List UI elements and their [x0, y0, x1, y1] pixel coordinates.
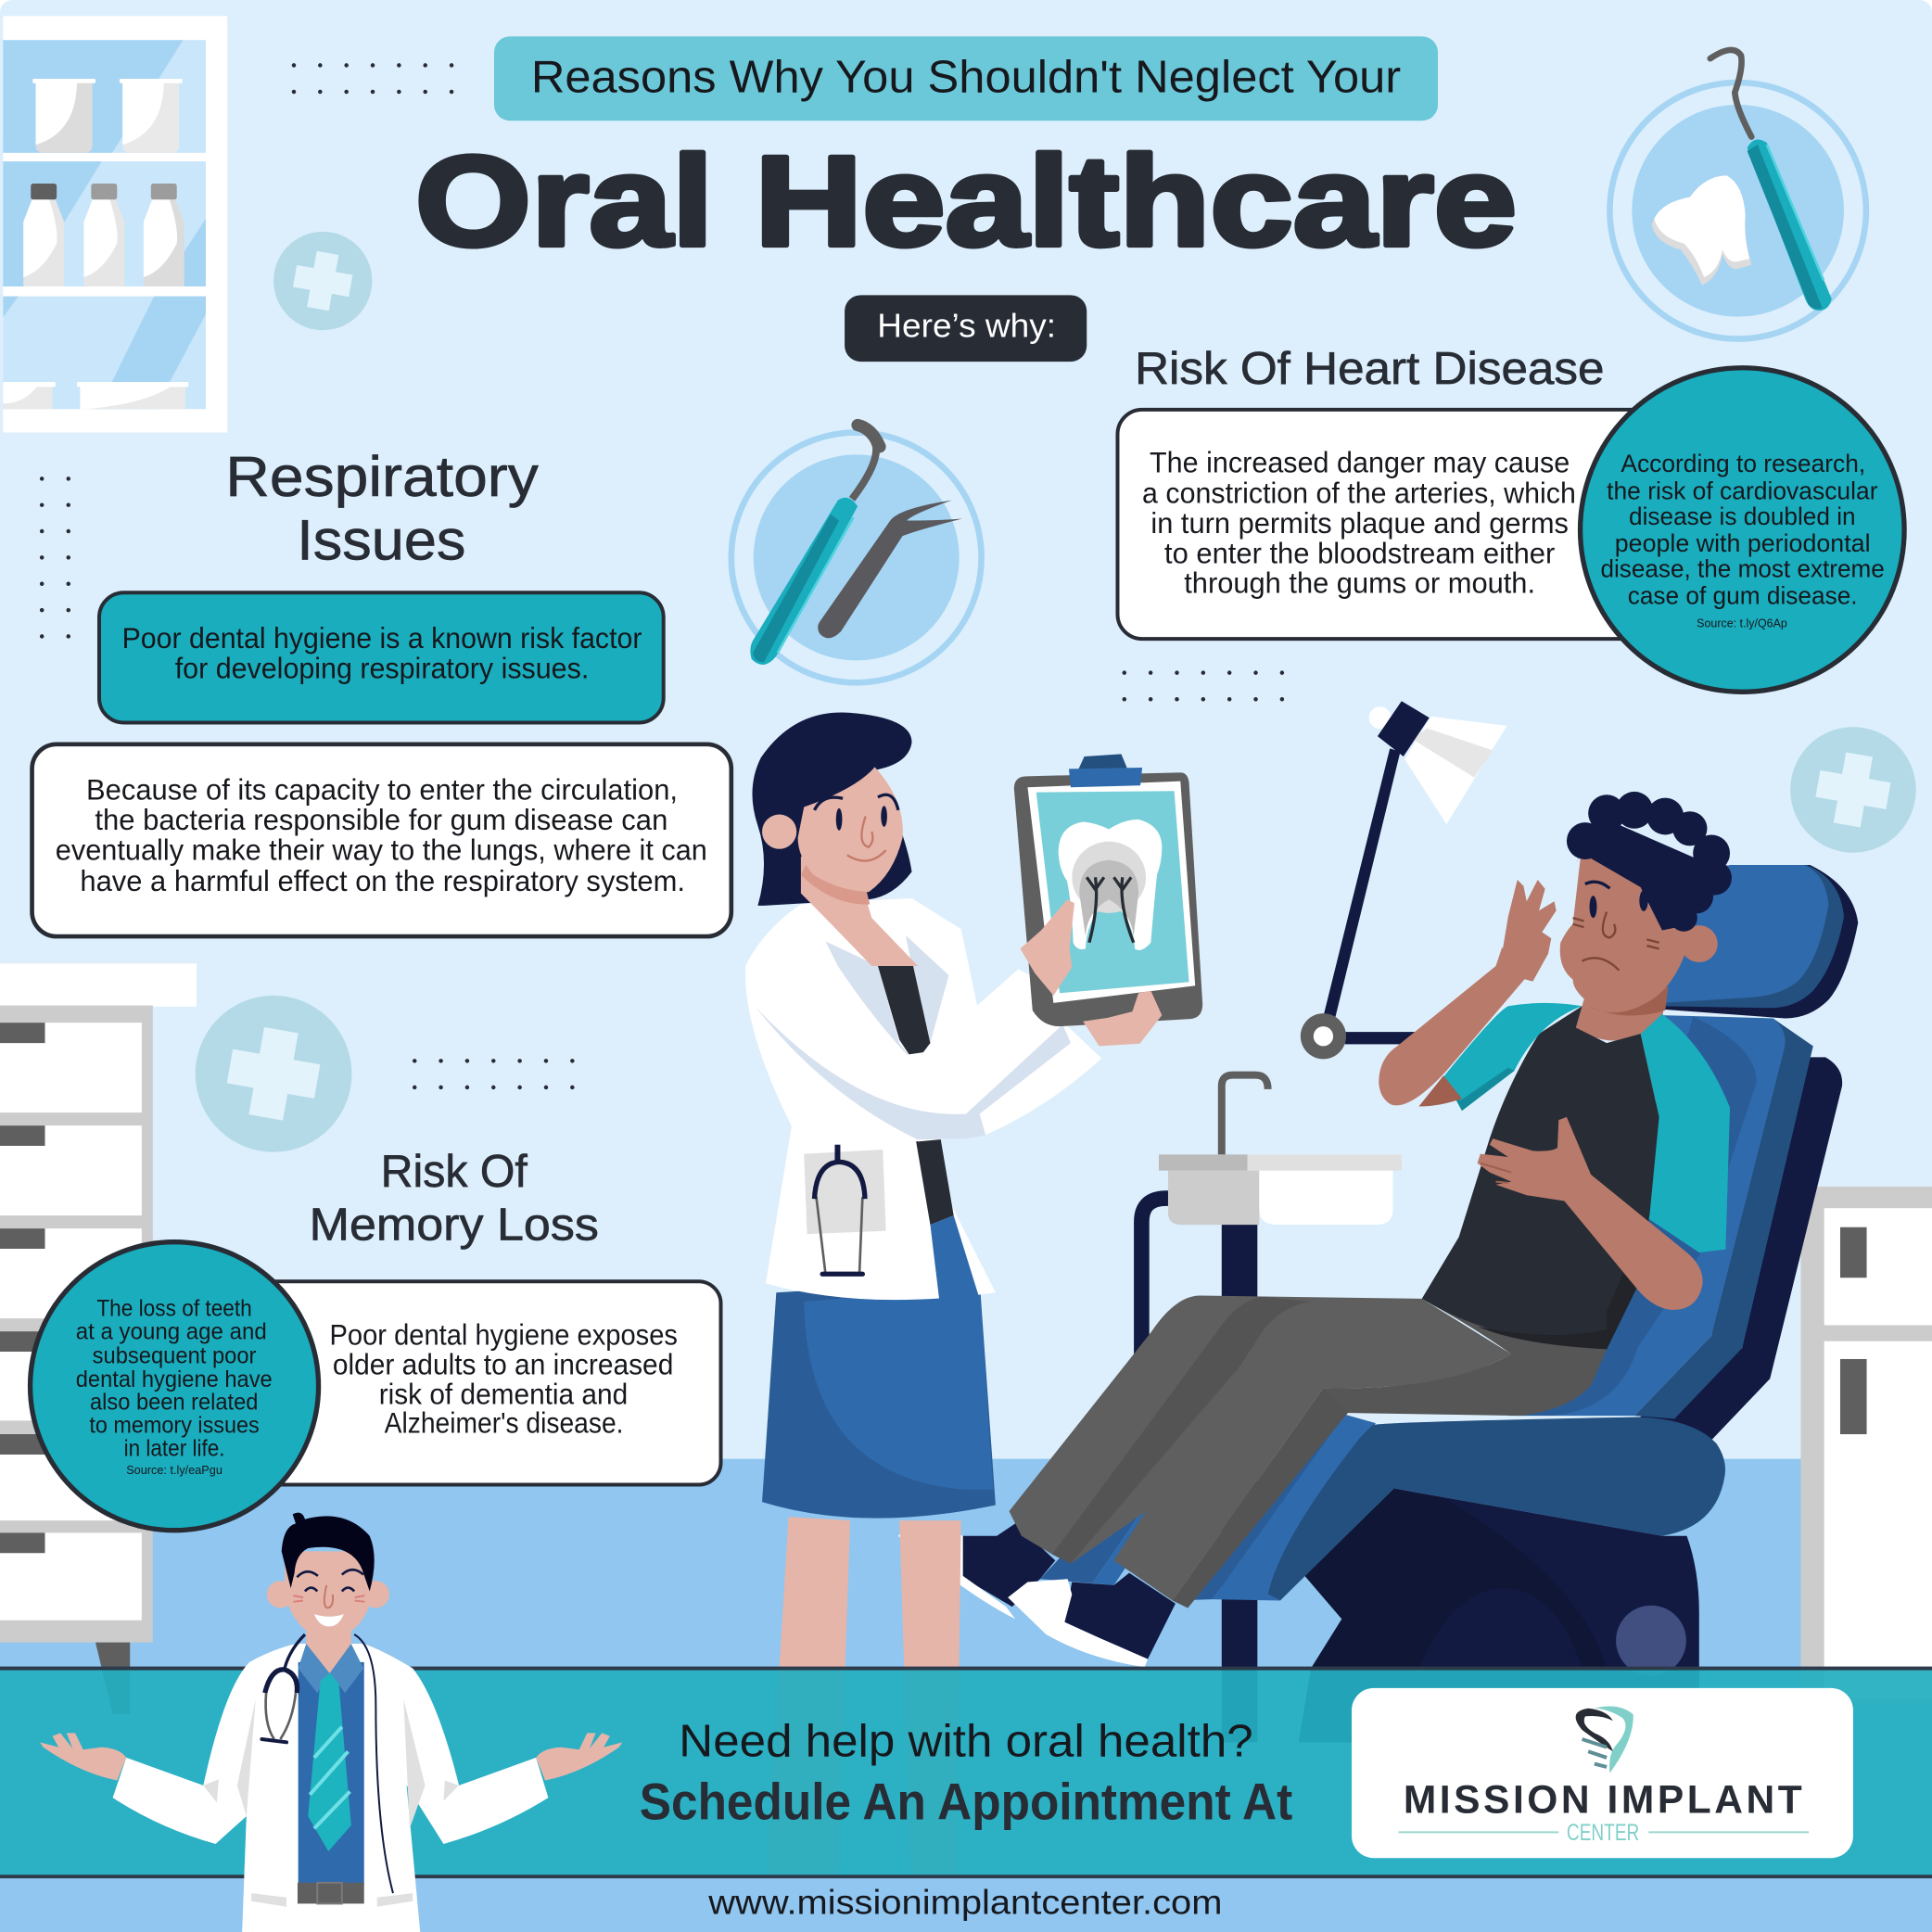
title banner: Reasons Why You Shouldn't Neglect Your	[531, 52, 1401, 103]
dentist pointing hand	[1020, 899, 1074, 996]
text block: lungs: Because of its capacity to enter the circulation,	[86, 774, 678, 807]
callout: cardiovascular risk: According to research,	[1621, 449, 1865, 477]
heading: heart disease: Risk Of Heart Disease	[1135, 343, 1604, 394]
callout: cardiovascular risk: disease, the most extreme	[1600, 554, 1885, 583]
appointment line: Schedule An Appointment At	[640, 1772, 1292, 1830]
text block: arteries: a constriction of the arteries, which	[1142, 477, 1576, 509]
heading: respiratory issues: Respiratory	[225, 445, 539, 508]
callout: risk factor: for developing respiratory issues.	[175, 653, 589, 685]
logo card	[1352, 1688, 1853, 1858]
skirt	[762, 1280, 996, 1519]
here's why pill: Here’s why:	[877, 307, 1056, 345]
text block: dementia: Poor dental hygiene exposes	[330, 1319, 678, 1352]
male doctor	[40, 1513, 622, 1932]
dental chair	[1040, 865, 1858, 1742]
text block: dementia: older adults to an increased	[333, 1349, 673, 1381]
call to action: Need help with oral health?	[679, 1716, 1253, 1767]
dental lamp	[1301, 701, 1506, 1059]
heading: respiratory issues	[225, 445, 539, 571]
logo name: MISSION IMPLANT	[1404, 1778, 1802, 1823]
callout: risk factor	[99, 592, 664, 723]
heading: memory loss: Memory Loss	[310, 1200, 599, 1251]
doctor head	[267, 1513, 389, 1641]
pocket stethoscope	[804, 1145, 886, 1274]
callout: tooth loss: to memory issues	[89, 1413, 260, 1439]
callout: cardiovascular risk: Source: t.ly/Q6Ap	[1697, 616, 1787, 630]
icon: medical plus right	[1780, 717, 1926, 862]
heading: memory loss	[310, 1146, 599, 1251]
doctor hands	[40, 1733, 622, 1781]
callout: cardiovascular risk: the risk of cardiovascular	[1607, 476, 1878, 504]
callout: tooth loss: at a young age and	[76, 1319, 267, 1345]
patient lower arm and hand	[1478, 1117, 1703, 1310]
callout: cardiovascular risk: disease is doubled in	[1629, 502, 1856, 530]
x-ray tooth	[1059, 820, 1162, 950]
text block: lungs	[32, 744, 731, 936]
title banner	[494, 36, 1438, 121]
doctor stethoscope	[261, 1634, 393, 1893]
female dentist	[745, 712, 1101, 1876]
text block: dementia	[235, 1281, 721, 1485]
callout: tooth loss	[31, 1242, 319, 1531]
website: www.missionimplantcenter.com	[707, 1883, 1222, 1922]
text block: arteries: in turn permits plaque and germs	[1150, 507, 1569, 540]
callout: tooth loss: Source: t.ly/eaPgu	[126, 1463, 222, 1477]
patient neck	[1576, 966, 1669, 1040]
text block: arteries: through the gums or mouth.	[1184, 566, 1535, 599]
text block: dementia: risk of dementia and	[379, 1378, 628, 1410]
patient raised arm	[1379, 880, 1557, 1107]
text block: dementia: Alzheimer's disease.	[385, 1407, 624, 1440]
callout: cardiovascular risk	[1581, 368, 1904, 692]
doctor tie	[308, 1672, 351, 1851]
icon: medical plus top	[266, 223, 380, 338]
patient t-shirt	[1422, 1003, 1730, 1349]
text block: lungs: the bacteria responsible for gum disease can	[95, 804, 667, 836]
patient head	[1560, 792, 1732, 1016]
decorative dot grids	[42, 65, 1285, 1087]
neck and face	[762, 767, 918, 966]
doctor neck	[306, 1619, 351, 1673]
clipboard with tooth x-ray	[1014, 754, 1202, 1046]
patient trousers	[1010, 1296, 1607, 1608]
dental sink and arm	[1141, 1075, 1402, 1742]
text block: lungs: eventually make their way to the lungs, where it can	[56, 834, 707, 867]
callout: tooth loss: dental hygiene have	[76, 1366, 273, 1392]
callout: tooth loss: The loss of teeth	[96, 1295, 252, 1321]
logo subtitle: CENTER	[1567, 1821, 1639, 1846]
dentist legs	[767, 1517, 961, 1876]
patient shoes	[898, 1522, 1176, 1667]
footer banner	[0, 1669, 1932, 1876]
callout: cardiovascular risk: people with periodontal	[1615, 528, 1871, 557]
heading: memory loss: Risk Of	[381, 1146, 527, 1197]
patient hair	[1567, 792, 1732, 932]
callout: cardiovascular risk: case of gum disease.	[1628, 580, 1858, 609]
callout: risk factor: Poor dental hygiene is a known risk factor	[122, 622, 642, 655]
callout: tooth loss: also been related	[90, 1389, 258, 1415]
callout: tooth loss: subsequent poor	[93, 1343, 256, 1369]
icon: medical plus left	[183, 984, 364, 1164]
panel: memory loss	[31, 1146, 721, 1531]
icon: logo tooth	[1576, 1707, 1633, 1773]
text block: arteries: The increased danger may cause	[1150, 447, 1570, 479]
here's why pill	[845, 295, 1087, 362]
text block: arteries: to enter the bloodstream either	[1164, 537, 1555, 569]
doctor coat	[113, 1644, 548, 1932]
panel: respiratory issues	[32, 445, 731, 936]
dentist supporting hand	[1083, 991, 1162, 1046]
icon: dental probe with tooth	[1609, 50, 1866, 338]
right drawer cabinet	[1800, 1187, 1932, 1704]
lab coat	[745, 898, 1101, 1302]
patient	[898, 880, 1730, 1667]
panel: heart disease	[1117, 343, 1904, 692]
text block: arteries	[1117, 410, 1659, 639]
icon: dental tools	[731, 426, 982, 682]
doctor collar	[299, 1644, 363, 1693]
callout: tooth loss: in later life.	[124, 1435, 225, 1461]
left drawer cabinet	[0, 963, 197, 1714]
hair back	[752, 712, 912, 906]
text block: lungs: have a harmful effect on the respiratory system.	[80, 865, 685, 897]
heading: respiratory issues: Issues	[297, 508, 465, 571]
title: Oral Healthcare	[415, 130, 1517, 273]
wall shelf with supplies	[3, 16, 227, 433]
